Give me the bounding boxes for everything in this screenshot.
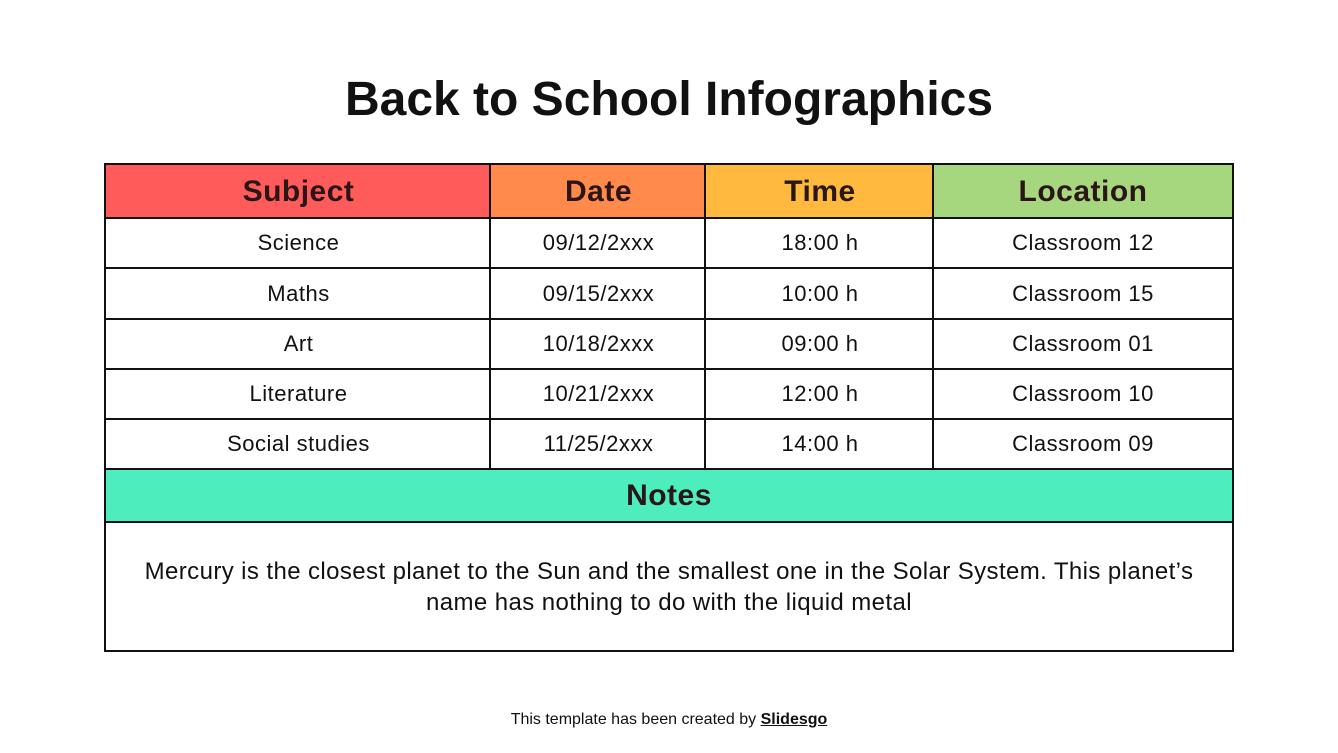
footer credit: This template has been created by Slidesgo [511, 711, 827, 728]
header: date [491, 165, 706, 218]
row: art: 09:00 h [782, 331, 858, 356]
row: social studies: Social studies [227, 431, 370, 456]
header: location: Location [1018, 174, 1148, 208]
title: Back to School Infographics [345, 73, 993, 126]
notes header [106, 470, 1232, 521]
table [104, 163, 1234, 652]
row: maths: 10:00 h [782, 280, 858, 306]
header: time [706, 165, 934, 218]
header: subject [106, 165, 491, 218]
row: literature: 10/21/2xxx [543, 381, 654, 406]
row: art: Art [284, 331, 313, 356]
row: social studies: 11/25/2xxx [544, 431, 653, 456]
row: social studies: 14:00 h [782, 431, 858, 456]
row: art: Classroom 01 [1012, 331, 1154, 356]
header: subject: Subject [243, 174, 354, 208]
row: science: 18:00 h [782, 230, 858, 255]
row: literature [250, 381, 1154, 406]
row: literature: Classroom 10 [1012, 381, 1154, 406]
notes text: Mercury is the closest planet to the Sun and the smallest one in the Solar System. This planet’s name has nothing to do with the liquid metal [145, 558, 1193, 616]
row: maths [267, 280, 1154, 306]
row: literature: Literature [250, 381, 347, 406]
row: science: Classroom 12 [1012, 230, 1154, 255]
row: social studies: Classroom 09 [1012, 431, 1154, 456]
row: maths: Classroom 15 [1012, 280, 1154, 306]
header: date: Date [565, 174, 632, 208]
header: location [934, 165, 1232, 218]
row: art: 10/18/2xxx [543, 331, 654, 356]
notes header: Notes [626, 478, 712, 512]
row: social studies [227, 431, 1154, 456]
row: art [284, 331, 1154, 356]
row: literature: 12:00 h [782, 381, 858, 406]
header: time: Time [784, 174, 856, 208]
row: science: 09/12/2xxx [543, 230, 654, 255]
row: science [258, 230, 1154, 255]
row: science: Science [258, 230, 339, 255]
row: maths: 09/15/2xxx [543, 280, 654, 306]
row: maths: Maths [267, 280, 330, 306]
